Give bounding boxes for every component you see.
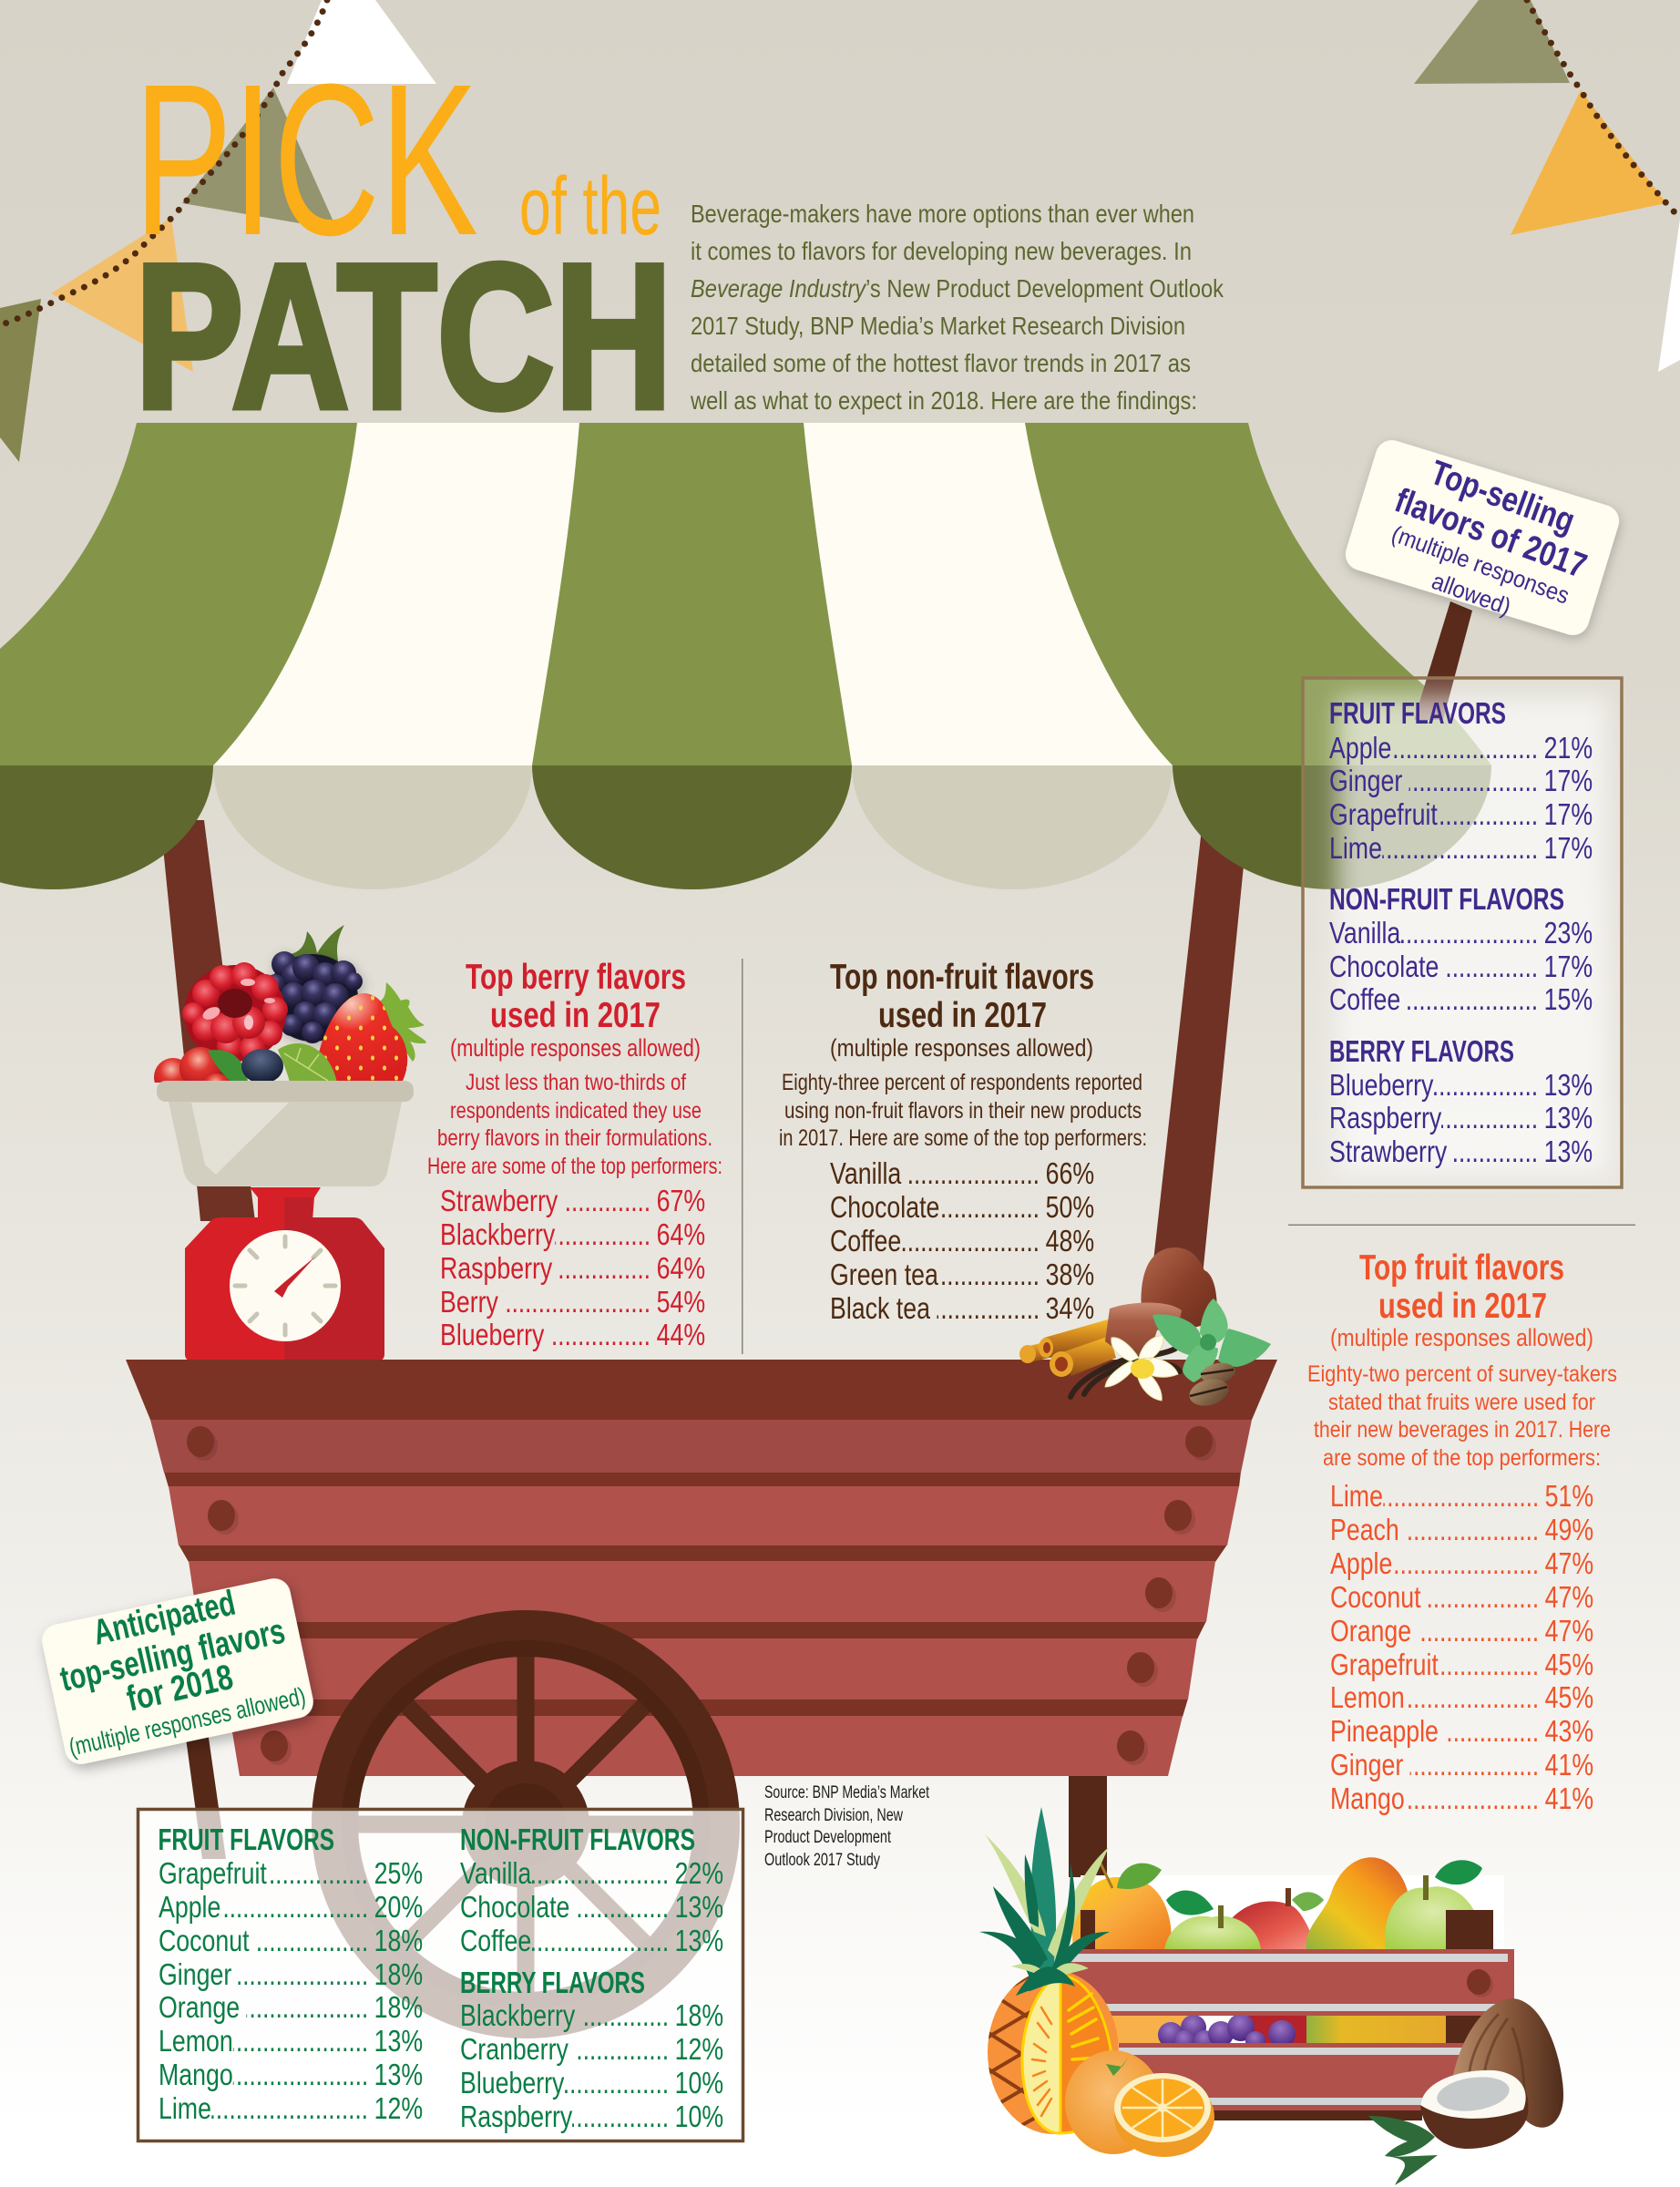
- row: Blackberry 18%: 18%: [675, 1998, 723, 2032]
- row: Ginger 18%: [159, 1956, 423, 1993]
- whole orange: [1065, 2050, 1162, 2154]
- intro paragraph: [690, 200, 1224, 415]
- row: Grapefruit 45%: 45%: [1545, 1648, 1593, 1681]
- row: Vanilla 22%: [460, 1855, 723, 1892]
- row: Peach 49%: 49%: [1545, 1513, 1593, 1546]
- crate posts: [1081, 1910, 1493, 2047]
- row: Lime 51%: 51%: [1545, 1479, 1593, 1513]
- row: Coffee 15%: Coffee: [1329, 982, 1400, 1016]
- row: Ginger 17%: [1329, 763, 1593, 799]
- description: using non-fruit flavors in their new products: [784, 1098, 1142, 1124]
- row: Orange 47%: Orange: [1330, 1614, 1411, 1648]
- cart counter top: [126, 1360, 1277, 1420]
- bunting: top left flags: [0, 0, 436, 462]
- row: Vanilla 23%: [1329, 915, 1593, 951]
- wheel rim: [335, 1633, 716, 2016]
- row: Raspberry 10%: Raspberry: [460, 2100, 572, 2133]
- orange half face: [1114, 2073, 1211, 2142]
- sign: anticipated top-selling flavors for 2018: [39, 1573, 316, 1767]
- row: Coconut 47%: [1330, 1579, 1593, 1616]
- row: Lemon 45%: Lemon: [1330, 1680, 1405, 1714]
- row: Pineapple 43%: 43%: [1545, 1714, 1593, 1748]
- red berries: [154, 1047, 230, 1083]
- heading: top berry flavors: Top berry flavors: [466, 958, 686, 997]
- cart slat bands: [164, 1472, 1241, 1717]
- green apple right: [1385, 1886, 1481, 1950]
- panel background: [1303, 678, 1622, 1187]
- row: Chocolate 13%: Chocolate: [460, 1890, 569, 1924]
- row: Coconut 18%: 18%: [374, 1924, 423, 1957]
- row: Raspberry 10%: 10%: [675, 2100, 723, 2133]
- row: Raspberry 13%: Raspberry: [1329, 1101, 1441, 1135]
- sign text: top-selling flavors: [56, 1612, 289, 1699]
- heading: top fruit flavors: Top fruit flavors: [1359, 1248, 1564, 1288]
- intro paragraph: Beverage Industry’s New Product Development Outlook: [691, 274, 1224, 303]
- row: Grapefruit 17%: Grapefruit: [1329, 797, 1438, 831]
- row: Mango 13%: Mango: [159, 2058, 232, 2091]
- row: Apple 21%: 21%: [1544, 731, 1593, 765]
- icon: bowl of kitchen scale: [157, 1081, 414, 1186]
- row: Orange 18%: Orange: [159, 1990, 240, 2024]
- sign: top-selling flavors of 2017: [1341, 436, 1624, 720]
- heading: berry flavors: BERRY FLAVORS: [1329, 1034, 1514, 1068]
- row: Strawberry 67%: Strawberry: [440, 1184, 558, 1217]
- row: Apple 47%: 47%: [1545, 1546, 1593, 1580]
- row: Coffee 13%: [460, 1923, 723, 1959]
- title word: PATCH: PATCH: [135, 221, 672, 451]
- sign text: Anticipated: [90, 1584, 239, 1653]
- row: Apple 47%: [1330, 1545, 1593, 1582]
- row: Cranberry 12%: 12%: [675, 2032, 723, 2066]
- awning: [0, 423, 1491, 889]
- coconut leaves: [1368, 2116, 1438, 2185]
- pineapple cut face: [1022, 1976, 1113, 2133]
- source note: Research Division, New: [764, 1806, 903, 1825]
- raspberry: [182, 962, 288, 1062]
- sign board: [1341, 436, 1624, 639]
- red apple: [1225, 1901, 1318, 1950]
- row: Vanilla 23%: Vanilla: [1329, 916, 1400, 950]
- intro paragraph: 2017 Study, BNP Media’s Market Research Division: [691, 312, 1185, 340]
- note: multiple responses: (multiple responses allowed): [450, 1034, 701, 1062]
- sign text: for 2018: [123, 1658, 237, 1720]
- row: Raspberry 13%: 13%: [1544, 1101, 1593, 1135]
- row: Blackberry 64%: Blackberry: [440, 1217, 555, 1251]
- row: Blueberry 10%: [460, 2065, 723, 2101]
- row: Grapefruit 45%: [1330, 1647, 1593, 1683]
- bunting: top right flags: [1414, 0, 1680, 372]
- cart slat 4: [210, 1638, 1197, 1699]
- pineapple body: [988, 1974, 1119, 2134]
- row: Chocolate 13%: 13%: [675, 1890, 723, 1924]
- cart body: [126, 1360, 1277, 1776]
- whole coconut: [1450, 1998, 1563, 2128]
- row: Ginger 41%: Ginger: [1330, 1748, 1403, 1781]
- leaves: [208, 1043, 337, 1083]
- heading: fruit flavors: FRUIT FLAVORS: [1329, 696, 1506, 730]
- row: Lime 17%: [1329, 830, 1593, 867]
- intro paragraph: Beverage-makers have more options than ever when: [691, 200, 1194, 228]
- row: Chocolate 17%: [1329, 949, 1593, 985]
- row: Grapefruit 25%: 25%: [374, 1856, 423, 1890]
- row: Green tea 38%: [830, 1257, 1094, 1293]
- wheel spokes: [342, 1640, 710, 2008]
- heading: non-fruit flavors: NON-FRUIT FLAVORS: [460, 1822, 695, 1856]
- row: Blueberry 44%: Blueberry: [440, 1318, 544, 1351]
- source note: Product Development: [764, 1828, 892, 1847]
- panel: top-selling flavors of 2017: [1303, 678, 1622, 1187]
- row: Peach 49%: [1330, 1512, 1593, 1548]
- sign note line 1: (multiple responses: [1388, 519, 1573, 610]
- row: Mango 41%: 41%: [1545, 1781, 1593, 1815]
- row: Grapefruit 17%: [1329, 796, 1593, 833]
- heading: used in 2017: used in 2017: [878, 996, 1047, 1035]
- sign heading line 1: Top-selling: [1425, 454, 1580, 541]
- row: Chocolate 17%: 17%: [1544, 950, 1593, 983]
- row: Vanilla 22%: Vanilla: [460, 1856, 531, 1890]
- row: Blueberry 13%: Blueberry: [1329, 1068, 1433, 1102]
- heading: fruit flavors: FRUIT FLAVORS: [159, 1822, 334, 1856]
- intro paragraph: it comes to flavors for developing new beverages. In: [691, 237, 1192, 265]
- row: Coffee 13%: 13%: [675, 1924, 723, 1957]
- row: Cranberry 12%: [460, 2031, 723, 2068]
- cart slat 2: [169, 1486, 1239, 1545]
- row: Apple 21%: Apple: [1329, 731, 1391, 765]
- row: Mango 41%: [1330, 1781, 1593, 1817]
- row: Strawberry 67%: [440, 1183, 705, 1219]
- heading: non-fruit flavors: NON-FRUIT FLAVORS: [1329, 882, 1564, 916]
- icon: berries: [154, 925, 426, 1083]
- fruits at back of crate: [1072, 1857, 1482, 1950]
- row: Chocolate 13%: [460, 1889, 723, 1925]
- description: Eighty-three percent of respondents reported: [782, 1070, 1142, 1095]
- sign note line 2: allowed): [1429, 567, 1514, 621]
- row: Chocolate 17%: Chocolate: [1329, 950, 1439, 983]
- row: Orange 47%: [1330, 1613, 1593, 1649]
- sign board: [39, 1576, 316, 1767]
- row: Coconut 18%: Coconut: [159, 1924, 249, 1957]
- panel: top non-fruit flavors: [779, 958, 1147, 1327]
- description: Just less than two-thirds of: [466, 1070, 686, 1095]
- row: Lemon 13%: Lemon: [159, 2024, 232, 2058]
- row: Mango 41%: Mango: [1330, 1781, 1405, 1815]
- row: Blueberry 13%: 13%: [1544, 1068, 1593, 1102]
- strawberry: [319, 993, 408, 1081]
- row: Blackberry 64%: [440, 1217, 705, 1253]
- row: Ginger 18%: Ginger: [159, 1957, 231, 1991]
- orange half shell: [1114, 2077, 1214, 2157]
- source note: Outlook 2017 Study: [764, 1851, 880, 1870]
- cart pole right: [1150, 820, 1248, 1294]
- row: Lime 12%: [159, 2090, 423, 2127]
- crate bolt: [1467, 1969, 1493, 1997]
- row: Blackberry 18%: [460, 1997, 723, 2034]
- yellow apple: [1072, 1877, 1172, 1950]
- description: berry flavors in their formulations.: [437, 1125, 712, 1151]
- row: Coffee 15%: [1329, 981, 1593, 1018]
- row: Apple 21%: [1329, 730, 1593, 766]
- source note: Source: BNP Media’s Market: [764, 1783, 930, 1802]
- wheel hub: [462, 1761, 589, 1888]
- row: Green tea 38%: 38%: [1046, 1258, 1094, 1291]
- row: Berry 54%: Berry: [440, 1285, 498, 1319]
- row: Blackberry 18%: Blackberry: [460, 1998, 575, 2032]
- icon: chocolates, spices and mint: [1019, 1248, 1271, 1410]
- grapes: [1158, 2014, 1296, 2052]
- row: Blueberry 10%: Blueberry: [460, 2066, 564, 2100]
- cart slat 1: [150, 1420, 1252, 1473]
- row: Coffee 48%: Coffee: [830, 1224, 901, 1258]
- sign heading line 2: flavors of 2017: [1390, 481, 1592, 586]
- awning cream stripes: [213, 423, 1173, 765]
- row: Vanilla 66%: [830, 1155, 1094, 1192]
- row: Lime 12%: 12%: [374, 2091, 423, 2125]
- icon: orange: [1065, 2050, 1214, 2157]
- row: Black tea 34%: Black tea: [830, 1291, 930, 1325]
- description: their new beverages in 2017. Here: [1314, 1417, 1611, 1443]
- description: respondents indicated they use: [450, 1098, 702, 1124]
- icon: fruit crate: [1064, 1857, 1514, 2120]
- pineapple crown: [979, 1807, 1110, 1996]
- coconut meat: [1420, 2070, 1526, 2119]
- panel background: [138, 1810, 743, 2141]
- description: in 2017. Here are some of the top performers:: [779, 1125, 1147, 1151]
- heading: top non-fruit flavors: Top non-fruit flavors: [830, 958, 1094, 997]
- row: Raspberry 64%: Raspberry: [440, 1251, 552, 1285]
- cart pole left: [160, 820, 255, 1221]
- icon: pineapple: [979, 1807, 1119, 2134]
- description: [779, 1070, 1147, 1151]
- coffee beans: [1186, 1360, 1237, 1410]
- row: Coffee 48%: 48%: [1046, 1224, 1094, 1258]
- row: Pineapple 43%: [1330, 1713, 1593, 1750]
- row: Coffee 13%: Coffee: [460, 1924, 531, 1957]
- panel: top fruit flavors: [1307, 1248, 1617, 1817]
- green apple left: [1164, 1916, 1261, 1950]
- row: Ginger 17%: Ginger: [1329, 764, 1402, 797]
- row: Ginger 41%: [1330, 1747, 1593, 1783]
- row: Strawberry 13%: Strawberry: [1329, 1135, 1447, 1168]
- cart bolts: [187, 1426, 1216, 1765]
- row: Coffee 15%: 15%: [1544, 982, 1593, 1016]
- row: Coconut 47%: Coconut: [1330, 1580, 1421, 1614]
- row: Peach 49%: Peach: [1330, 1513, 1399, 1546]
- row: Black tea 34%: 34%: [1046, 1291, 1094, 1325]
- row: Lemon 45%: 45%: [1545, 1680, 1593, 1714]
- cinnamon sticks: [1019, 1319, 1116, 1377]
- row: Blueberry 10%: 10%: [675, 2066, 723, 2100]
- panel: top berry flavors: [427, 958, 722, 1353]
- sign post: [1414, 601, 1472, 720]
- fruits visible through gap: [1093, 2014, 1446, 2052]
- row: Raspberry 64%: [440, 1250, 705, 1287]
- description: [427, 1070, 722, 1179]
- row: Coconut 18%: [159, 1923, 423, 1959]
- row: Ginger 18%: 18%: [374, 1957, 423, 1991]
- heading: used in 2017: used in 2017: [1378, 1287, 1547, 1326]
- white backdrop behind fruit: [1081, 1875, 1504, 1957]
- cart wheel: [335, 1633, 716, 2016]
- row: Ginger 41%: 41%: [1545, 1748, 1593, 1781]
- row: Grapefruit 25%: Grapefruit: [159, 1856, 266, 1890]
- row: Green tea 38%: Green tea: [830, 1258, 938, 1291]
- description: are some of the top performers:: [1323, 1445, 1601, 1471]
- row: Ginger 17%: 17%: [1544, 764, 1593, 797]
- vanilla flower: [1105, 1336, 1178, 1401]
- row: Apple 20%: [159, 1889, 423, 1925]
- row: Berry 54%: 54%: [657, 1285, 705, 1319]
- row: Vanilla 22%: 22%: [675, 1856, 723, 1890]
- row: Lemon 13%: 13%: [374, 2024, 423, 2058]
- row: Lemon 45%: [1330, 1679, 1593, 1716]
- source note: [764, 1783, 930, 1870]
- blackberry leaves: [292, 925, 344, 962]
- blackberry: [265, 951, 363, 1043]
- crate lower slat: [1119, 2043, 1465, 2110]
- row: Strawberry 67%: 67%: [657, 1184, 705, 1217]
- row: Orange 47%: 47%: [1545, 1614, 1593, 1648]
- coconut half shell: [1420, 2070, 1529, 2149]
- row: Grapefruit 45%: Grapefruit: [1330, 1648, 1439, 1681]
- chocolate heart: [1141, 1248, 1217, 1330]
- row: Lime 12%: Lime: [159, 2091, 210, 2125]
- row: Black tea 34%: [830, 1290, 1094, 1327]
- row: Berry 54%: [440, 1284, 705, 1320]
- row: Lime 17%: 17%: [1544, 831, 1593, 865]
- chocolate block: [1105, 1303, 1182, 1356]
- intro paragraph: detailed some of the hottest flavor trends in 2017 as: [691, 349, 1191, 377]
- awning scallops: [213, 765, 1173, 889]
- row: Coconut 47%: 47%: [1545, 1580, 1593, 1614]
- row: Blueberry 44%: [440, 1317, 705, 1353]
- row: Strawberry 13%: 13%: [1544, 1135, 1593, 1168]
- title: [134, 39, 672, 451]
- cart slat 3: [189, 1561, 1215, 1622]
- description: Eighty-two percent of survey-takers: [1307, 1361, 1617, 1387]
- row: Blueberry 44%: 44%: [657, 1318, 705, 1351]
- row: Blackberry 64%: 64%: [657, 1217, 705, 1251]
- panel: anticipated top-selling flavors for 2018: [138, 1810, 743, 2141]
- awning green stripes: [0, 423, 1491, 765]
- row: Mango 13%: 13%: [374, 2058, 423, 2091]
- row: Apple 20%: 20%: [374, 1890, 423, 1924]
- row: Cranberry 12%: Cranberry: [460, 2032, 569, 2066]
- yellow apple leaf: [1117, 1864, 1162, 1889]
- row: Coffee 48%: [830, 1223, 1094, 1259]
- row: Strawberry 13%: [1329, 1134, 1593, 1170]
- row: Lemon 13%: [159, 2023, 423, 2059]
- mango: [1306, 1857, 1411, 1950]
- description: stated that fruits were used for: [1328, 1390, 1595, 1415]
- row: Apple 20%: Apple: [159, 1890, 220, 1924]
- sign text: [42, 1573, 308, 1761]
- cart rear leg: [1069, 1775, 1107, 1877]
- row: Vanilla 23%: 23%: [1544, 916, 1593, 950]
- row: Grapefruit 25%: [159, 1855, 423, 1892]
- row: Chocolate 50%: 50%: [1046, 1190, 1094, 1224]
- vanilla pods: [1070, 1349, 1180, 1397]
- row: Vanilla 66%: 66%: [1046, 1156, 1094, 1190]
- note: multiple responses: (multiple responses allowed): [830, 1034, 1093, 1062]
- icon: kitchen scale: [185, 1187, 384, 1360]
- intro paragraph: well as what to expect in 2018. Here are the findings:: [690, 386, 1197, 415]
- row: Vanilla 66%: Vanilla: [830, 1156, 901, 1190]
- row: Raspberry 64%: 64%: [657, 1251, 705, 1285]
- blueberry: [241, 1049, 283, 1083]
- mint leaves: [1152, 1299, 1271, 1382]
- row: Chocolate 50%: Chocolate: [830, 1190, 939, 1224]
- sign post 2018: [185, 1731, 226, 1859]
- scale dial: [230, 1230, 341, 1341]
- row: Orange 18%: 18%: [374, 1990, 423, 2024]
- row: Lime 51%: [1330, 1478, 1593, 1514]
- heading: used in 2017: used in 2017: [490, 996, 661, 1035]
- title words: of the: of the: [519, 161, 661, 252]
- icon: coconut: [1368, 1998, 1563, 2185]
- row: Chocolate 50%: [830, 1189, 1094, 1226]
- row: Apple 47%: Apple: [1330, 1546, 1392, 1580]
- strawberry leaves: [378, 982, 426, 1062]
- row: Lime 17%: Lime: [1329, 831, 1382, 865]
- cart slat 5: [230, 1716, 1183, 1776]
- sign text: (multiple responses allowed): [67, 1682, 308, 1761]
- title word: PICK: PICK: [134, 39, 478, 281]
- heading: berry flavors: BERRY FLAVORS: [460, 1966, 645, 1999]
- row: Orange 18%: [159, 1989, 423, 2026]
- description: [1307, 1361, 1617, 1471]
- crate upper slat: [1064, 1949, 1514, 2016]
- row: Mango 13%: [159, 2057, 423, 2093]
- row: Lime 51%: Lime: [1330, 1479, 1383, 1513]
- row: Grapefruit 17%: 17%: [1544, 797, 1593, 831]
- description: Here are some of the top performers:: [427, 1154, 722, 1179]
- row: Raspberry 10%: [460, 2099, 723, 2135]
- row: Pineapple 43%: Pineapple: [1330, 1714, 1439, 1748]
- note: multiple responses: (multiple responses allowed): [1330, 1324, 1593, 1351]
- row: Blueberry 13%: [1329, 1067, 1593, 1104]
- row: Raspberry 13%: [1329, 1100, 1593, 1136]
